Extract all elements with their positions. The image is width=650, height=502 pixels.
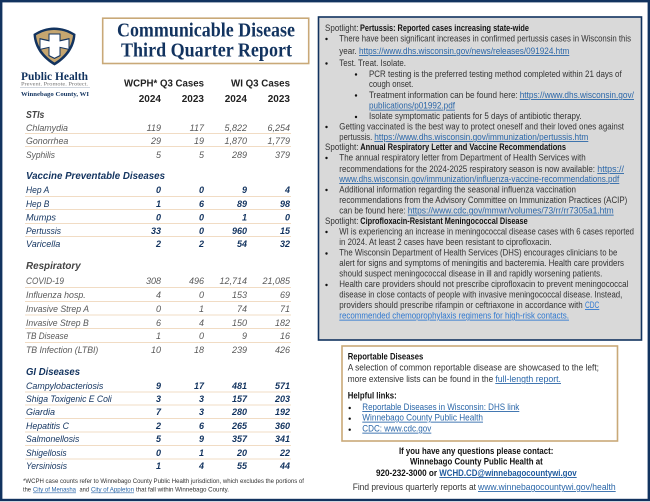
spotlight: pertussis: cough onset. — [369, 79, 413, 89]
table section: GI Diseases: 6 — [199, 421, 205, 431]
table column headers: 2024 — [225, 94, 247, 105]
table section: Respiratory: 10 — [151, 345, 161, 355]
table section: GI Diseases: Giardia — [26, 407, 55, 417]
table section: STIs: 19 — [194, 136, 204, 146]
table section: Respiratory: Invasive Strep A — [26, 304, 89, 314]
helpful links list — [348, 402, 520, 434]
table section: Vaccine Preventable Diseases: Vaccine Preventable Diseases — [26, 170, 165, 182]
table section: Vaccine Preventable Diseases: Mumps — [26, 212, 56, 222]
table section: STIs: STIs — [26, 109, 44, 121]
spotlight: respiratory letter: can be found here: — [339, 206, 406, 216]
spotlight: respiratory letter: www.dhs.wisconsin.gov/immunization/influenza-vaccine-recommendations.pdf — [338, 174, 620, 184]
table section: STIs: Syphilis — [26, 150, 55, 160]
panel: reportable diseases: A selection of common reportable disease are showcased to the left; — [348, 363, 599, 373]
panel: reportable diseases: Reportable Diseases — [348, 352, 423, 362]
table section: Respiratory: 308 — [146, 276, 161, 286]
spotlight: pertussis: Spotlight: — [325, 23, 358, 33]
spotlight: pertussis: PCR testing is the preferred testing method completed within 21 days of — [369, 69, 622, 79]
table section: Respiratory: 4 — [199, 318, 204, 328]
table section: Respiratory: 239 — [231, 345, 247, 355]
table section: Vaccine Preventable Diseases: 1 — [156, 199, 161, 209]
table section: Respiratory: Influenza hosp. — [26, 290, 86, 300]
table section: STIs: 117 — [190, 123, 205, 133]
table section: Vaccine Preventable Diseases: 0 — [156, 212, 161, 222]
table section: GI Diseases: 571 — [275, 381, 290, 391]
panel: reportable diseases: full-length report. — [495, 374, 561, 384]
spotlight: meningococcal disease: CDC — [585, 300, 600, 310]
table section: Respiratory: 1 — [199, 304, 204, 314]
table section: Respiratory — [25, 260, 291, 355]
table section: STIs: 6,254 — [267, 123, 290, 133]
logo: Winnebago County Public Health — [20, 28, 90, 98]
panel: spotlights — [318, 17, 642, 340]
icon: shield with cross — [34, 28, 76, 66]
table section: Vaccine Preventable Diseases: 98 — [280, 199, 290, 209]
table section: GI Diseases: 4 — [198, 461, 204, 471]
table section: Respiratory: TB Disease — [26, 331, 68, 341]
table section: Vaccine Preventable Diseases: 0 — [199, 226, 204, 236]
spotlight: respiratory letter — [325, 142, 627, 216]
table section: Vaccine Preventable Diseases: 6 — [199, 199, 205, 209]
table section: Vaccine Preventable Diseases: 54 — [237, 239, 247, 249]
table section: STIs: 1,870 — [224, 136, 247, 146]
spotlight: respiratory letter: Annual Respiratory Letter and Vaccine Recommendations — [360, 142, 566, 152]
table section: Vaccine Preventable Diseases: 33 — [151, 226, 161, 236]
spotlight: meningococcal disease: Ciprofloxacin-Resistant Meningococcal Disease — [360, 216, 528, 226]
table section: Vaccine Preventable Diseases: 960 — [232, 226, 247, 236]
spotlight: respiratory letter: recommendations for the 2024-2025 respiratory season is now available: — [339, 164, 595, 174]
table section: GI Diseases: Hepatitis C — [26, 421, 69, 431]
table section: Respiratory: 4 — [156, 290, 161, 300]
title: Communicable Disease — [117, 20, 295, 42]
table section: GI Diseases: 280 — [231, 407, 247, 417]
table section: Vaccine Preventable Diseases: Hep A — [26, 185, 49, 195]
table section: STIs: Chlamydia — [26, 123, 68, 133]
table section: Respiratory: 21,085 — [261, 276, 291, 286]
table section: Respiratory: 150 — [232, 318, 247, 328]
spotlight: pertussis: Pertussis: Reported cases increasing state-wide — [360, 23, 529, 33]
contact information: If you have any questions please contact: — [399, 446, 553, 456]
table section: Vaccine Preventable Diseases: 0 — [199, 185, 204, 195]
table section: GI Diseases: Shiga Toxigenic E Coli — [26, 394, 113, 404]
previous reports link: Find previous quarterly reports at — [353, 482, 477, 492]
logo: Winnebago County Public Health: Winnebago County, WI — [21, 91, 89, 98]
spotlight: meningococcal disease: alert for signs and symptoms of meningitis and bacteremia. Health care providers — [339, 258, 625, 268]
spotlight: respiratory letter: Spotlight: — [325, 142, 358, 152]
table section: Vaccine Preventable Diseases: 15 — [280, 226, 291, 236]
table section: STIs — [25, 109, 291, 160]
spotlight: pertussis: https://www.dhs.wisconsin.gov/ — [520, 90, 635, 100]
table section: GI Diseases: 3 — [199, 394, 204, 404]
table section: GI Diseases: 9 — [199, 434, 204, 444]
table section: GI Diseases — [25, 366, 291, 471]
spotlight: pertussis: Getting vaccinated is the best way to protect oneself and their loved ones against — [339, 122, 624, 132]
contact information: Winnebago County Public Health at — [410, 457, 543, 467]
spotlight: pertussis: pertussis. — [339, 132, 372, 142]
table section: GI Diseases: 357 — [232, 434, 248, 444]
spotlight: pertussis: https://www.dhs.wisconsin.gov/news/releases/091924.htm — [359, 46, 569, 56]
table section: Respiratory: 0 — [156, 304, 161, 314]
panel: reportable diseases: Helpful links: — [348, 391, 397, 401]
spotlight: meningococcal disease: providers should prescribe rifampin or ceftriaxone in accordance with — [339, 300, 583, 310]
panel: reportable diseases: more extensive lists can be found in the — [348, 374, 493, 384]
spotlight: pertussis: Treatment information can be found here: — [369, 90, 518, 100]
footnote: City of Appleton — [91, 486, 135, 494]
helpful links list: Reportable Diseases in Wisconsin: DHS link — [362, 402, 520, 412]
spotlight: meningococcal disease: in 2024. At least 2 cases have been resistant to ciprofloxacin. — [339, 237, 552, 247]
table section: Respiratory: COVID-19 — [26, 276, 64, 286]
table section: Respiratory: 0 — [199, 331, 204, 341]
spotlight: pertussis: https://www.dhs.wisconsin.gov/immunization/pertussis.htm — [374, 132, 588, 142]
table section: Respiratory: 426 — [275, 345, 290, 355]
footnote — [23, 478, 304, 494]
spotlight: respiratory letter: Additional information regarding the seasonal influenza vaccination — [339, 185, 576, 195]
table section: Vaccine Preventable Diseases: Hep B — [26, 199, 49, 209]
table section: GI Diseases: GI Diseases — [26, 366, 80, 378]
spotlight: pertussis: publications/p01992.pdf — [369, 101, 456, 111]
table section: Respiratory: 182 — [275, 318, 290, 328]
table section: STIs: 5 — [156, 150, 162, 160]
spotlight: respiratory letter: The annual respiratory letter from Department of Health Services with — [339, 153, 586, 163]
table section: STIs: 289 — [231, 150, 247, 160]
spotlight: pertussis: Isolate symptomatic patients for 5 days of antibiotic therapy. — [369, 111, 582, 121]
spotlight: meningococcal disease — [325, 216, 634, 321]
table section: Vaccine Preventable Diseases: 0 — [199, 212, 204, 222]
table section: Respiratory: Respiratory — [26, 260, 82, 272]
table section: GI Diseases: 44 — [279, 461, 290, 471]
table section: GI Diseases: 17 — [194, 381, 205, 391]
table section: GI Diseases: 5 — [156, 434, 162, 444]
table section: GI Diseases: 20 — [236, 448, 247, 458]
table section: Vaccine Preventable Diseases: 2 — [155, 239, 161, 249]
contact information: WCHD.CD@winnebagocountywi.gov — [439, 468, 577, 478]
spotlight: pertussis — [325, 23, 635, 142]
logo: Winnebago County Public Health: Prevent. Promote. Protect. — [21, 82, 88, 88]
table section: GI Diseases: 55 — [237, 461, 248, 471]
spotlight: meningococcal disease: should suspect meningococcal disease in ill and rapidly worsening patients. — [339, 269, 602, 279]
table section: GI Diseases: Shigellosis — [26, 448, 67, 458]
table section: Respiratory: 69 — [280, 290, 290, 300]
table column headers: 2024 — [139, 94, 161, 105]
panel: reportable diseases — [342, 346, 618, 441]
table column headers: 2023 — [268, 94, 290, 105]
table column headers — [124, 78, 290, 105]
table section: Respiratory: 71 — [280, 304, 290, 314]
table section: GI Diseases: 9 — [156, 381, 161, 391]
table section: GI Diseases: 192 — [275, 407, 290, 417]
table section: STIs: 5 — [199, 150, 205, 160]
table section: Respiratory: 9 — [242, 331, 247, 341]
table section: Vaccine Preventable Diseases: 9 — [242, 185, 247, 195]
contact information — [376, 446, 577, 478]
helpful links list: Winnebago County Public Health — [362, 413, 483, 423]
table section: GI Diseases: 481 — [231, 381, 247, 391]
table section: Respiratory: 12,714 — [219, 276, 247, 286]
table section: GI Diseases: 341 — [275, 434, 290, 444]
title: Third Quarter Report — [121, 40, 292, 62]
spotlight: meningococcal disease: Health care providers should not prescribe ciprofloxacin to prevent meningococcal — [339, 279, 628, 289]
table section: Respiratory: 496 — [189, 276, 204, 286]
table section: Vaccine Preventable Diseases: 89 — [237, 199, 247, 209]
table section: GI Diseases: 265 — [231, 421, 248, 431]
table section: GI Diseases: Campylobacteriosis — [26, 381, 104, 391]
table section: GI Diseases: 203 — [274, 394, 290, 404]
table section: STIs: Gonorrhea — [26, 136, 68, 146]
table section: GI Diseases: 1 — [199, 448, 204, 458]
footnote: and — [80, 486, 90, 494]
helpful links list: CDC: www.cdc.gov — [362, 424, 432, 434]
spotlight: respiratory letter: https://www.cdc.gov/mmwr/volumes/73/rr/rr7305a1.htm — [408, 206, 614, 216]
footnote: the — [23, 486, 32, 494]
table section: GI Diseases: 1 — [156, 461, 161, 471]
table section: Vaccine Preventable Diseases — [25, 170, 291, 249]
table section: Vaccine Preventable Diseases: Pertussis — [26, 226, 61, 236]
spotlight: pertussis: Test. Treat. Isolate. — [339, 58, 406, 68]
table section: Respiratory: 16 — [280, 331, 290, 341]
contact information: 920-232-3000 or — [376, 468, 438, 478]
table section: GI Diseases: Yersiniosis — [26, 461, 67, 471]
spotlight: meningococcal disease: recommended chemoprophylaxis regimens for high-risk contacts. — [339, 311, 569, 321]
table section: STIs: 29 — [150, 136, 161, 146]
logo: Winnebago County Public Health: Public Health — [21, 71, 89, 83]
title — [103, 18, 309, 64]
table column headers: 2023 — [182, 94, 204, 105]
table section: GI Diseases: 157 — [232, 394, 248, 404]
spotlight: respiratory letter: https:// — [597, 164, 625, 174]
table section: Vaccine Preventable Diseases: 1 — [242, 212, 247, 222]
table section: GI Diseases: 3 — [199, 407, 204, 417]
table column headers: WCPH* Q3 Cases — [124, 78, 204, 90]
table section: Respiratory: 153 — [232, 290, 247, 300]
table section: STIs: 1,779 — [267, 136, 290, 146]
table section: Vaccine Preventable Diseases: 0 — [156, 185, 161, 195]
table section: Respiratory: 1 — [156, 331, 161, 341]
table section: STIs: 379 — [275, 150, 290, 160]
spotlight: pertussis: year. — [339, 46, 357, 56]
table section: Respiratory: 0 — [199, 290, 204, 300]
table section: Respiratory: 6 — [156, 318, 161, 328]
table section: Vaccine Preventable Diseases: 32 — [280, 239, 290, 249]
table section: GI Diseases: 22 — [279, 448, 290, 458]
table section: Vaccine Preventable Diseases: 2 — [198, 239, 204, 249]
spotlight: respiratory letter: recommendations from the Advisory Committee on Immunization Practices (ACIP) — [339, 195, 627, 205]
footnote: that fall within Winnebago County. — [136, 486, 229, 494]
previous reports link — [353, 482, 616, 492]
table section: GI Diseases: Salmonellosis — [26, 434, 80, 444]
table section: GI Diseases: 7 — [156, 407, 162, 417]
table section: GI Diseases: 3 — [156, 394, 161, 404]
table section: Respiratory: 74 — [237, 304, 247, 314]
footnote: *WCPH case counts refer to Winnebago County Public Health jurisdiction, which excludes the portions of — [23, 478, 304, 485]
table section: STIs: 119 — [147, 123, 161, 133]
table section: GI Diseases: 0 — [156, 448, 161, 458]
previous reports link: www.winnebagocountywi.gov/health — [477, 482, 616, 492]
table section: Vaccine Preventable Diseases: Varicella — [26, 239, 60, 249]
table section: Respiratory: 18 — [194, 345, 204, 355]
table section: Respiratory: Invasive Strep B — [26, 318, 89, 328]
spotlight: meningococcal disease: Spotlight: — [325, 216, 358, 226]
table section: GI Diseases: 360 — [275, 421, 290, 431]
spotlight: meningococcal disease: The Wisconsin Department of Health Services (DHS) encourages clinicians to be — [339, 248, 617, 258]
table column headers: WI Q3 Cases — [231, 78, 290, 90]
footnote: City of Menasha — [33, 486, 77, 494]
table section: STIs: 5,822 — [224, 123, 247, 133]
spotlight: meningococcal disease: disease in close contacts of people with invasive meningococcal disease. Instead, — [339, 290, 622, 300]
table section: Vaccine Preventable Diseases: 0 — [285, 212, 290, 222]
table section: Respiratory: TB Infection (LTBI) — [26, 345, 98, 355]
table section: Vaccine Preventable Diseases: 4 — [284, 185, 290, 195]
table section: GI Diseases: 2 — [155, 421, 161, 431]
